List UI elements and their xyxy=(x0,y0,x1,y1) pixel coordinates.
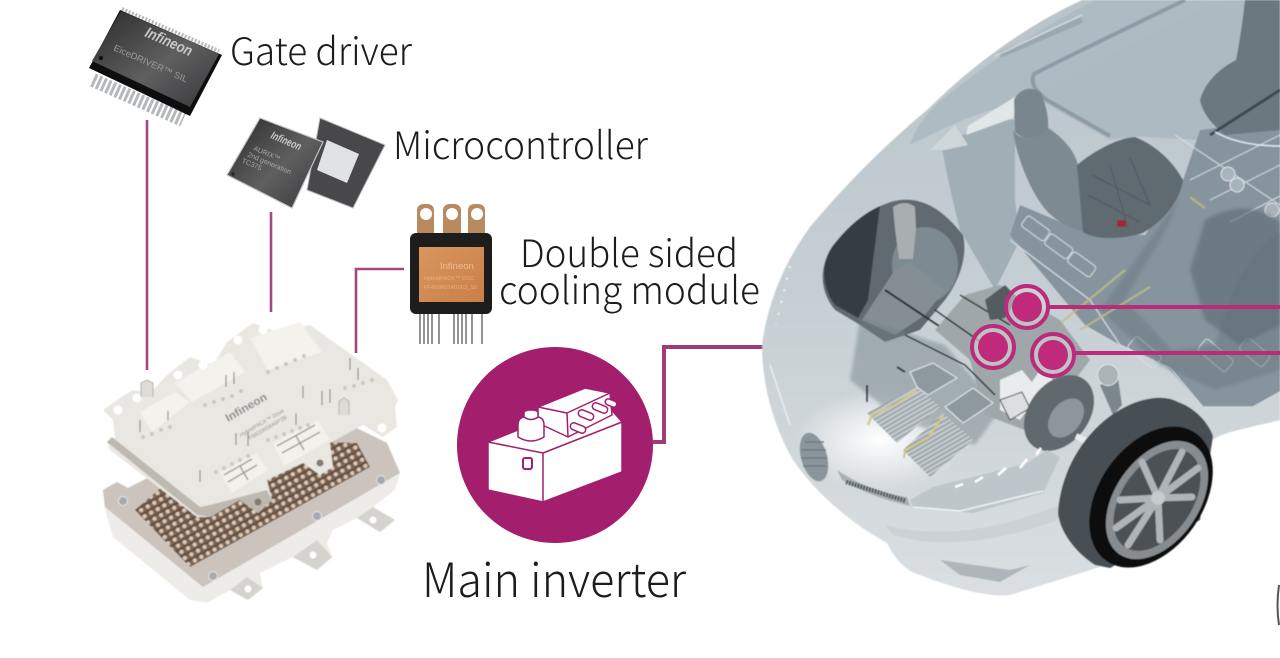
label: double sided cooling module xyxy=(499,223,760,315)
callout marker: left xyxy=(972,326,1014,368)
connector: gate driver to power module xyxy=(146,120,148,370)
chip model text: AURIX™ xyxy=(252,145,281,163)
label: double sided cooling module: cooling module xyxy=(499,260,760,315)
lower hood highlight xyxy=(795,390,965,490)
car body shell xyxy=(762,0,1280,595)
center tunnel xyxy=(1100,200,1280,390)
chip model text: TC375 xyxy=(240,158,263,172)
chip brand text: Infineon xyxy=(269,130,303,153)
icon: gate driver chip xyxy=(89,9,222,120)
label: microcontroller: Microcontroller xyxy=(393,115,648,170)
icon: microcontroller chips xyxy=(227,118,385,208)
connector: microcontroller to power module xyxy=(270,212,272,312)
side marker dots xyxy=(776,266,790,325)
brake disc xyxy=(1010,361,1122,465)
inverter units xyxy=(867,363,993,477)
icon: main inverter circle xyxy=(457,347,653,543)
lower bumper intake xyxy=(940,560,1030,582)
yellow cables xyxy=(1062,197,1205,330)
callout marker: upper xyxy=(1006,286,1280,328)
module brand text: Infineon xyxy=(440,261,474,272)
dashboard xyxy=(942,120,1020,290)
chip model text: 2nd generation xyxy=(246,152,292,176)
headlight xyxy=(837,448,1060,513)
upper plate model text: HybridPACK™ Drive xyxy=(239,408,286,439)
power module: exploded view xyxy=(103,322,400,603)
label: gate driver: Gate driver xyxy=(230,21,412,76)
module model text: FF400R07A01E3_S6 xyxy=(424,285,477,291)
label: double sided cooling module: Double sided xyxy=(520,223,738,278)
car: transparent cutaway xyxy=(762,0,1280,625)
stray arc at lower right xyxy=(1278,585,1279,625)
connector: main inverter to car xyxy=(653,347,980,442)
lower plate with pin fins xyxy=(103,400,400,603)
front left wheel well xyxy=(823,200,964,342)
inverter pictogram xyxy=(488,388,622,502)
chip model text: EiceDRIVER™ SIL xyxy=(112,43,189,84)
front seat xyxy=(1013,89,1183,238)
icon: double sided cooling module xyxy=(410,204,492,344)
rear seat xyxy=(1200,0,1280,135)
engine bay xyxy=(905,285,1090,430)
label: main inverter: Main inverter xyxy=(422,542,686,611)
module model text: HybridPACK™ DSC xyxy=(424,276,474,282)
connector: double sided module to power module xyxy=(356,269,404,353)
callout marker: right xyxy=(1032,334,1280,376)
upper plate model text: FS820R08A6P2B xyxy=(248,415,289,442)
chip brand text: Infineon xyxy=(142,24,195,60)
windshield xyxy=(910,0,1240,145)
upper plate xyxy=(103,322,398,517)
cabin and battery floor xyxy=(1010,120,1280,407)
wheel xyxy=(1058,398,1238,591)
upper plate brand text: Infineon xyxy=(224,391,270,425)
grille badge xyxy=(795,429,833,485)
